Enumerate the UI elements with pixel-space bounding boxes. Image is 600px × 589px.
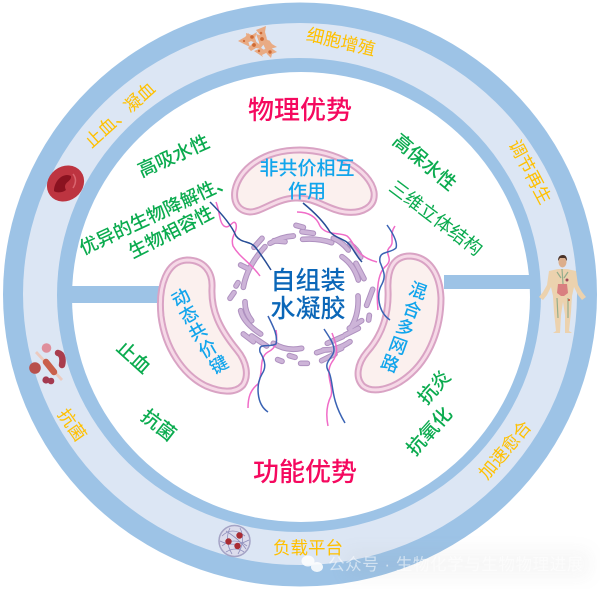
label: non-covalent interaction: 非共价相互 [259, 158, 355, 180]
label: mixed multi-network: 合 [400, 298, 424, 322]
ring label: drug loading platform: 负载平台 [273, 538, 343, 558]
label: high absorbency: 高吸水性 [135, 131, 213, 182]
label: antioxidant: 抗氧化 [402, 403, 457, 460]
label: dynamic covalent bonds: 共 [185, 319, 211, 345]
label: dynamic covalent bonds: 价 [195, 336, 221, 362]
watermark text: 公众号 · 生物化学与生物物理进展 [328, 555, 584, 574]
label: mixed multi-network: 网 [386, 334, 410, 358]
label: dynamic covalent bonds [168, 285, 232, 378]
label: dynamic covalent bonds: 动 [168, 285, 194, 311]
label: biodegradability: 优异的生物降解性、 [76, 169, 236, 259]
title: hydrogel line two: 水凝胶 [270, 295, 346, 323]
green labels: functional properties [112, 337, 457, 460]
left connector bar [70, 286, 162, 303]
label: water retention: 高保水性 [388, 130, 461, 195]
title: self-assembled hydrogel: 自组装 [270, 267, 346, 295]
label: biocompatibility: 生物相容性 [125, 202, 217, 262]
ring label: antibacterial: 抗菌 [54, 405, 90, 445]
watermark: WeChat icon [302, 556, 323, 572]
ring label: cell proliferation: 细胞增殖 [305, 24, 377, 60]
heading: physical advantages: 物理优势 [248, 95, 352, 125]
panel: dynamic covalent bonds [160, 260, 246, 391]
label: 3D structure: 三维立体结构 [385, 176, 487, 260]
icon: bacteria [29, 343, 63, 384]
ring label: accelerated healing: 加速愈合 [475, 417, 535, 483]
heading: functional advantages: 功能优势 [253, 457, 357, 487]
panel: mixed multi-network [358, 256, 441, 390]
icon: human body [539, 255, 586, 333]
label: mixed multi-network: 路 [378, 352, 402, 376]
label: dynamic covalent bonds: 键 [206, 352, 232, 378]
watermark shadow [345, 550, 590, 578]
label: dynamic covalent bonds: 态 [176, 302, 202, 328]
label: antibacterial: 抗菌 [137, 405, 180, 446]
green labels: physical properties [76, 130, 487, 262]
icon: loaded nanoparticle [219, 526, 250, 556]
label: mixed multi-network: 混 [406, 279, 430, 303]
icon: red blood cell [40, 158, 91, 209]
panel: non-covalent interaction [235, 150, 374, 212]
polymer strands [210, 202, 396, 426]
label: anti-inflammatory: 抗炎 [414, 366, 456, 409]
label: mixed multi-network: 多 [393, 316, 417, 340]
ring label: hemostasis and coagulation: 止血、凝血 [81, 78, 159, 152]
ring label: regulating regeneration: 调节再生 [505, 136, 555, 208]
orange ring labels [54, 24, 555, 558]
self-assembled micelle ring [230, 225, 373, 363]
label: mixed multi-network [378, 279, 430, 376]
label: hemostasis: 止血 [112, 337, 155, 379]
label: interaction line two: 作用 [288, 180, 326, 202]
right connector bar [444, 275, 532, 289]
icon: cell cluster [238, 26, 277, 58]
